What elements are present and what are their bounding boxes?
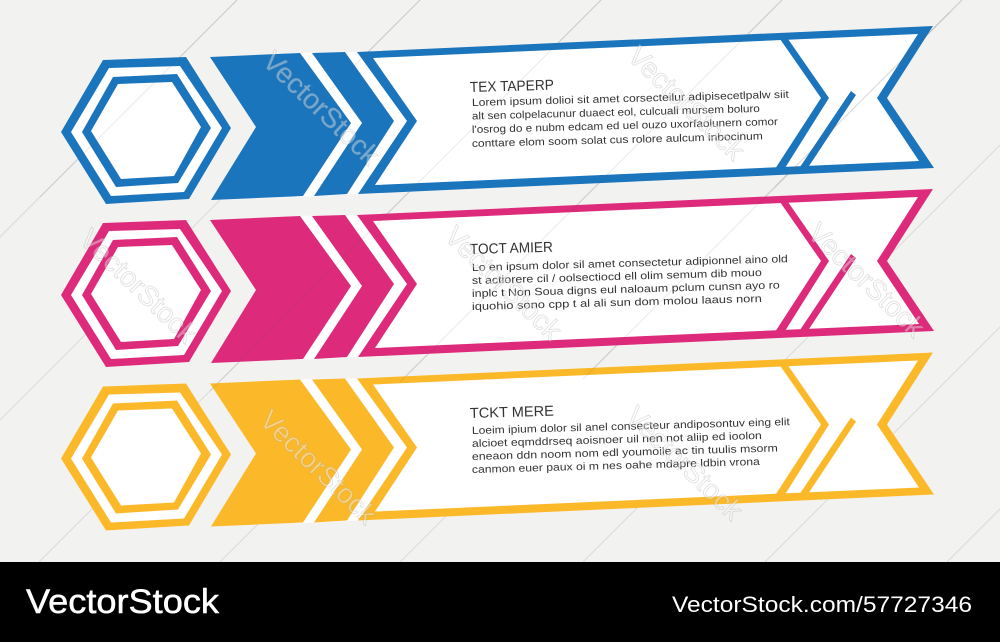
- footer bar: [0, 562, 1000, 642]
- yellow body text: Loeim ipium dolor sil anel consecteur andiposontuv eing elit: [472, 416, 790, 437]
- magenta heading: TOCT AMIER: [470, 240, 553, 258]
- watermarks: VectorStock: [74, 223, 204, 350]
- watermarks: VectorStock: [439, 220, 569, 347]
- row 1: blue banner: [61, 26, 934, 204]
- yellow body text: [472, 416, 790, 476]
- footer logo text: VectorStock: [26, 583, 220, 621]
- yellow body text: eneaon ddn noom nom edl youmoile ac tin tuulis msorm: [472, 442, 778, 463]
- yellow body text: canmon euer paux oi m nes oahe mdapre ldbin vrona: [472, 456, 760, 476]
- magenta text block: [470, 240, 788, 313]
- magenta body text: inplc t Non Soua digns eul naloaum pclum cunsn ayo ro: [472, 279, 780, 300]
- blue body text: alt sen colpelacunur duaect eol, culcuali mursem boluro: [472, 103, 760, 122]
- watermarks: VectorStock: [257, 45, 387, 172]
- magenta chevrons: [210, 215, 407, 363]
- yellow heading: TCKT MERE: [470, 404, 554, 422]
- blue hexagon icon: [61, 57, 231, 204]
- watermarks: VectorStock: [254, 404, 384, 531]
- magenta body text: st actiorere cil / oolsectiocd ell olim semum dib mouo: [472, 267, 762, 287]
- watermarks: VectorStock: [802, 217, 932, 344]
- yellow ribbon panel: [357, 352, 934, 520]
- watermarks: VectorStock: [620, 400, 750, 527]
- yellow text block: [470, 404, 790, 476]
- row 2: magenta banner: [61, 189, 934, 367]
- yellow chevrons: [210, 378, 407, 526]
- magenta hexagon icon: [61, 220, 231, 367]
- blue heading: TEX TAPERP: [470, 78, 554, 96]
- footer image id: VectorStock.com/57727346: [672, 592, 972, 617]
- blue chevrons: [210, 52, 407, 200]
- blue body text: l'osrog do e nubm edcam ed uel ouzo uxorfaolunern comor: [472, 116, 779, 136]
- yellow body text: alcioet eqmddrseq aoisnoer uil nen not aliip ed ioolon: [472, 430, 762, 450]
- watermarks: [74, 40, 932, 531]
- blue body text: Lorem ipsum dolioi sit amet corsecteilur adipisecetlpalw siit: [472, 89, 789, 109]
- blue body text: conttare elom soom solat cus rolore aulcum inbocinum: [472, 130, 763, 150]
- magenta body text: iquohio sono cpp t al ali sun dom molou laaus norn: [472, 293, 762, 313]
- blue body text: [472, 89, 789, 150]
- magenta ribbon panel: [357, 189, 934, 357]
- blue ribbon panel: [357, 26, 934, 194]
- blue text block: [470, 78, 789, 150]
- watermarks: VectorStock: [622, 40, 752, 167]
- yellow hexagon icon: [61, 384, 231, 530]
- row 3: yellow banner: [61, 352, 934, 530]
- magenta body text: Lo en ipsum dolor sil amet consectetur adipionnel aino old: [472, 253, 788, 274]
- magenta body text: [472, 253, 788, 313]
